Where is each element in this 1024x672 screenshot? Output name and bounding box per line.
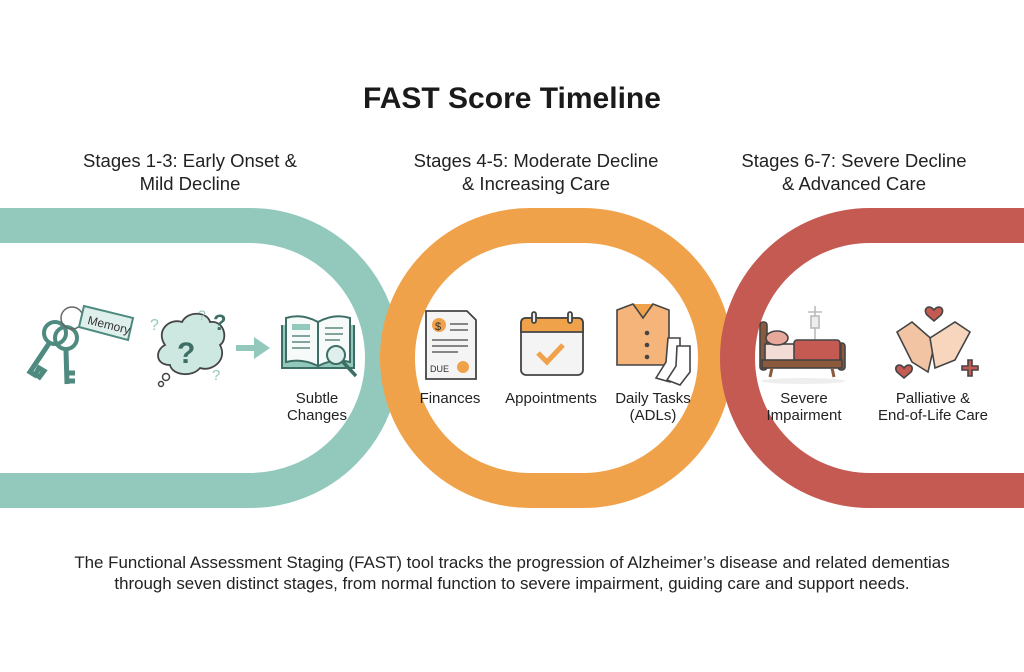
heading: stages 1-3 — [83, 150, 297, 194]
heading: stages 1-3: Mild Decline — [140, 173, 240, 194]
label: daily tasks — [615, 390, 691, 424]
label: palliative care: End-of-Life Care — [878, 407, 988, 424]
icon: keys with memory tag: Memory — [86, 313, 132, 337]
icon: finances bill: $ — [435, 321, 441, 333]
icon: calendar with check — [521, 312, 583, 375]
label: appointments: Appointments — [505, 390, 597, 407]
icon: thought cloud with question marks: ? — [212, 367, 220, 384]
icon: open book with magnifier — [282, 316, 356, 376]
label: daily tasks: (ADLs) — [630, 407, 676, 424]
loop: orange stages 4-5 — [398, 226, 716, 490]
icon: thought cloud with question marks: ? — [150, 317, 159, 334]
label: severe impairment: Severe — [780, 390, 828, 407]
label: palliative care: Palliative & — [896, 390, 970, 407]
loop: red stages 6-7 — [738, 226, 1024, 490]
title: FAST Score Timeline — [363, 82, 661, 115]
heading: stages 6-7: & Advanced Care — [782, 173, 926, 194]
label: palliative care — [878, 390, 988, 424]
label: subtle changes: Subtle — [296, 390, 338, 407]
icon: keys with memory tag — [30, 306, 133, 384]
heading: stages 4-5: Stages 4-5: Moderate Decline — [414, 150, 658, 171]
icon: shirt and socks — [617, 304, 690, 385]
label: subtle changes — [287, 390, 347, 424]
heading: stages 6-7 — [741, 150, 967, 194]
icon: handshake with hearts — [896, 307, 978, 378]
icon: thought cloud with question marks: ? — [213, 310, 226, 335]
icon: thought cloud with question marks — [150, 307, 226, 386]
label: severe impairment: Impairment — [766, 407, 842, 424]
label: severe impairment — [766, 390, 842, 424]
arrow: teal right — [236, 337, 270, 359]
icon: finances bill — [426, 311, 476, 379]
icon: finances bill: DUE — [430, 364, 449, 374]
footer description: The Functional Assessment Staging (FAST) tool tracks the progression of Alzheimer’s disease and related dementias — [74, 553, 950, 572]
footer description: through seven distinct stages, from normal function to severe impairment, guiding care and support needs. — [114, 574, 910, 593]
label: daily tasks: Daily Tasks — [615, 390, 691, 407]
heading: stages 6-7: Stages 6-7: Severe Decline — [741, 150, 967, 171]
loop: teal stages 1-3 — [0, 226, 382, 490]
label: subtle changes: Changes — [287, 407, 347, 424]
heading: stages 4-5 — [414, 150, 658, 194]
footer description — [74, 553, 950, 593]
icon: thought cloud with question marks: ? — [198, 307, 206, 323]
label: finances: Finances — [420, 390, 480, 407]
icon: hospital bed — [760, 306, 845, 384]
heading: stages 4-5: & Increasing Care — [462, 173, 610, 194]
heading: stages 1-3: Stages 1-3: Early Onset & — [83, 150, 297, 171]
icon: thought cloud with question marks: ? — [177, 337, 195, 370]
